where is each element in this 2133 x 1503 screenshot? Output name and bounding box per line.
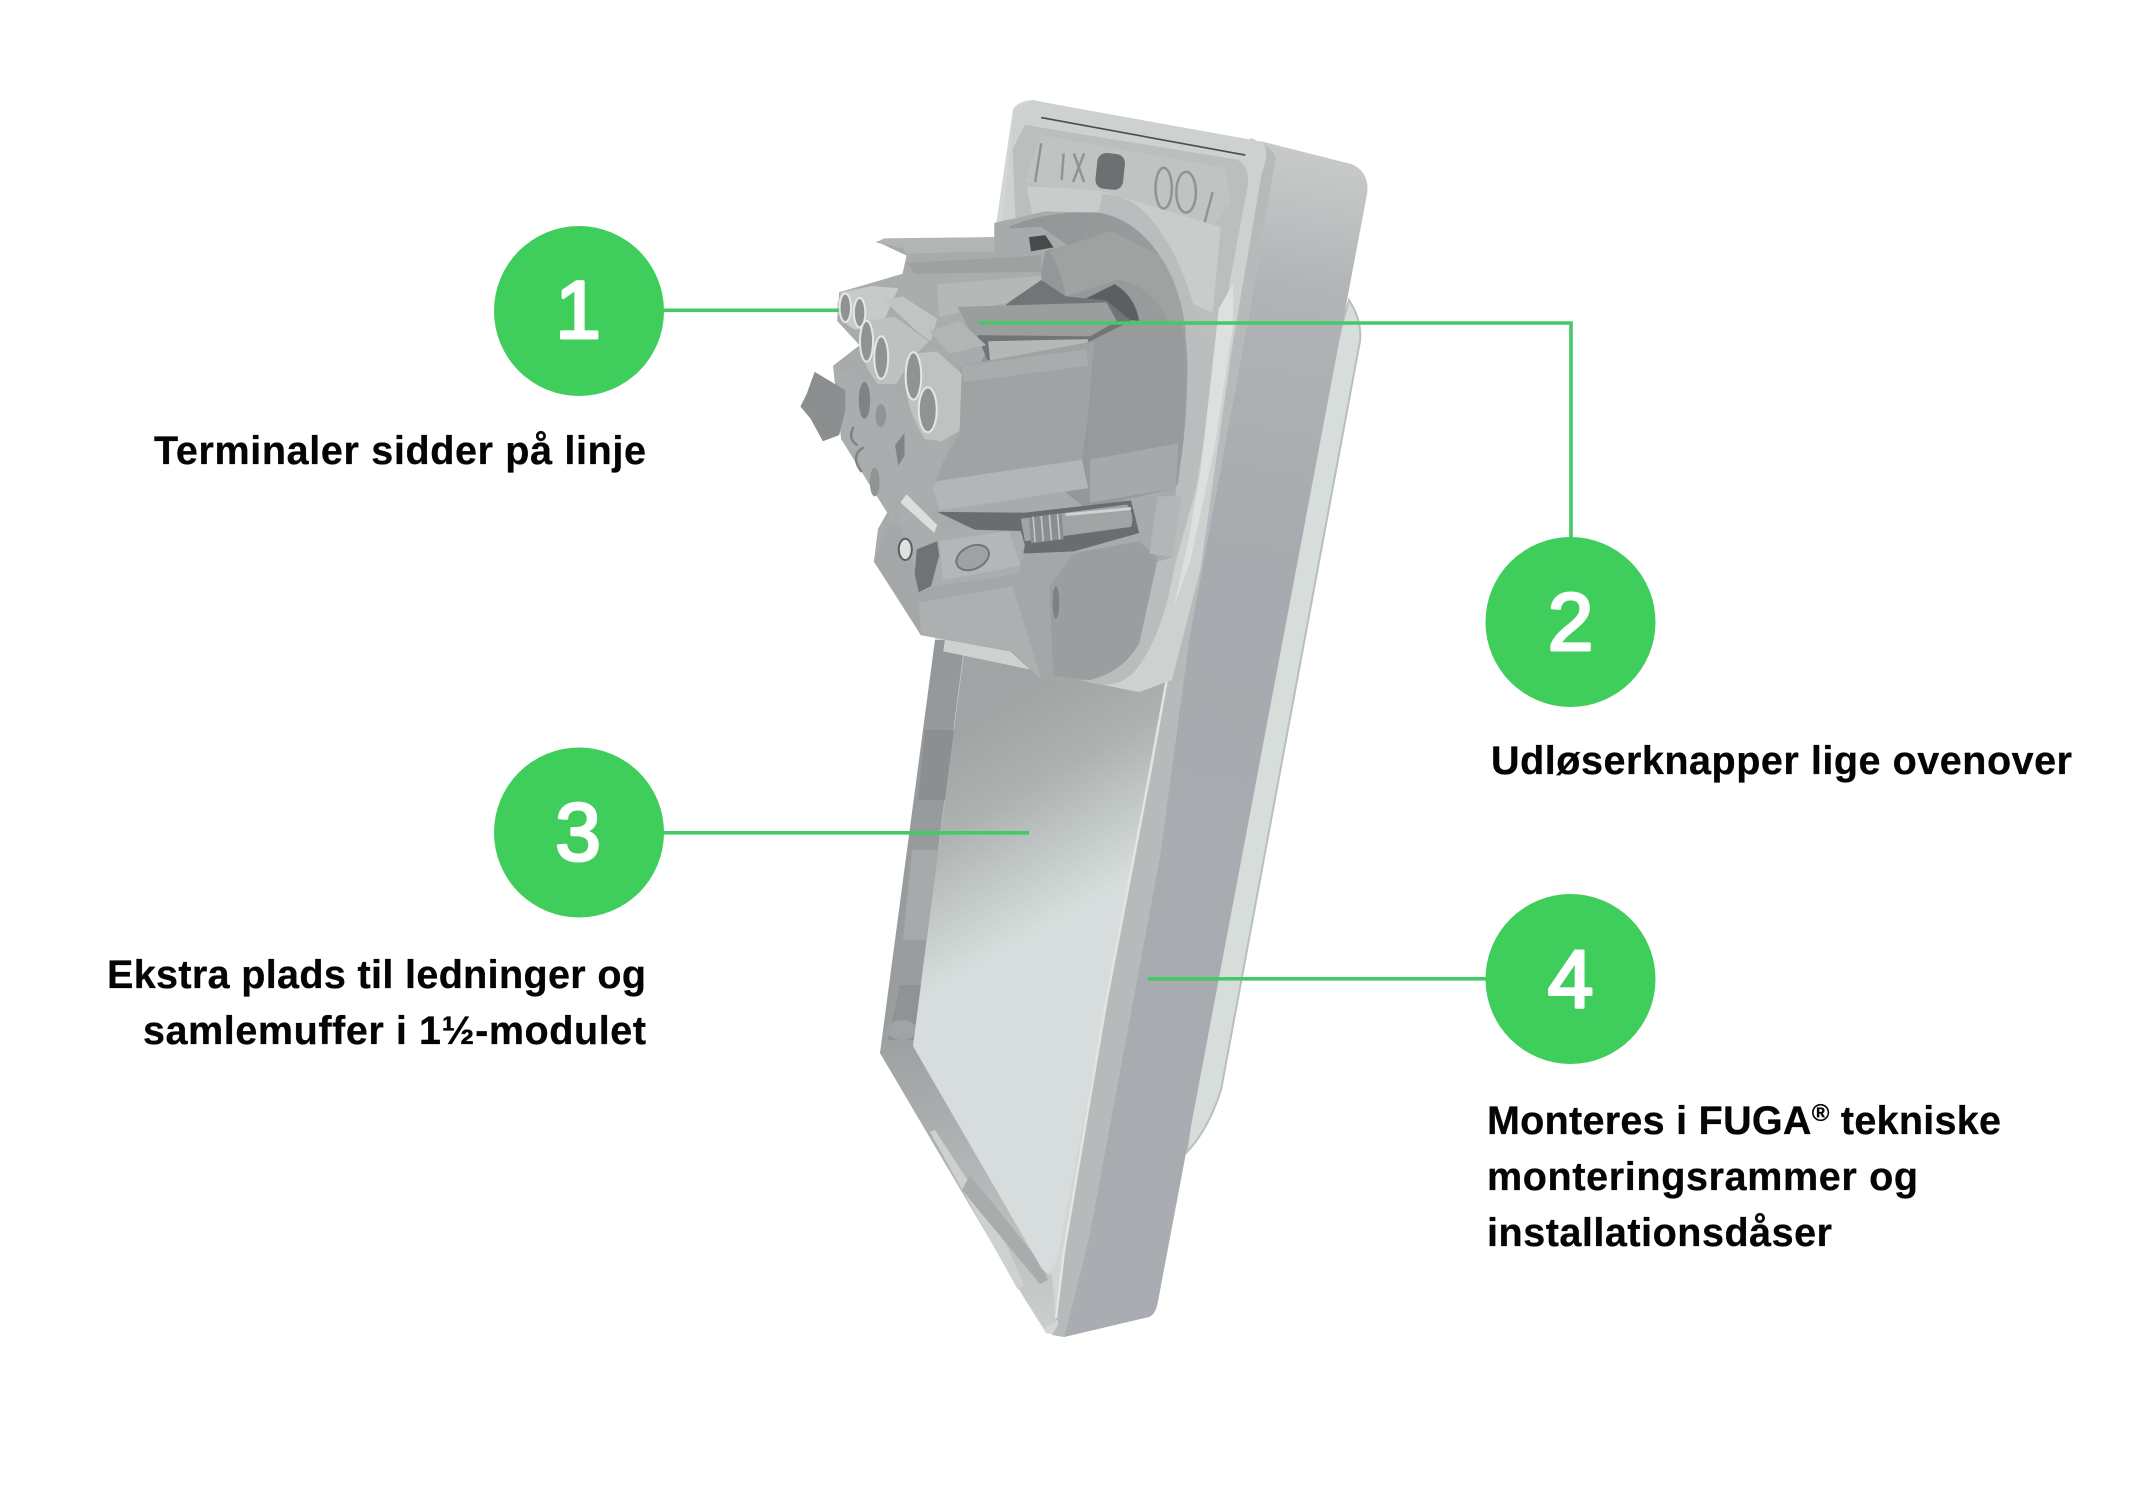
frame highlight — [1056, 175, 1257, 1318]
face markings — [851, 382, 904, 496]
frame inner strip — [1052, 138, 1276, 1337]
marker 3: 3 — [555, 787, 601, 878]
side hook — [800, 372, 845, 441]
label 4: installationsdåser — [1487, 1211, 1832, 1255]
moulded symbols — [1035, 143, 1213, 223]
callout line 4 — [1148, 977, 1488, 981]
lower housing — [874, 525, 1158, 680]
rear terminal nub — [837, 286, 898, 330]
label 2: Udløserknapper lige ovenover — [1491, 739, 2072, 783]
wall details — [888, 730, 1048, 1290]
main front tab — [958, 302, 1117, 336]
inner plate — [913, 640, 1178, 1274]
label 4 — [1487, 1099, 2001, 1255]
marker 2: 2 — [1548, 577, 1593, 668]
marking strip — [1025, 135, 1231, 227]
label 4: Monteres i FUGA — [1487, 1099, 1811, 1143]
clip right — [1149, 496, 1182, 558]
label 3 — [107, 953, 646, 1053]
middle terminal nub — [860, 317, 929, 384]
cylinder dark recess — [1082, 284, 1139, 321]
block rear — [841, 272, 1041, 341]
top tab 1 — [876, 237, 994, 253]
marker 2 — [1486, 537, 1656, 707]
marker 1 — [494, 226, 664, 396]
marker 1: 1 — [555, 265, 601, 356]
socket body flange — [1041, 194, 1204, 685]
label 1: Terminaler sidder på linje — [154, 429, 646, 473]
interior back wall — [1013, 125, 1248, 590]
socket silhouette base — [833, 211, 1187, 680]
upper flange plate — [1027, 186, 1221, 313]
terminal block face — [833, 366, 956, 627]
hole in rim — [1095, 152, 1126, 191]
callout line 3 — [660, 831, 1029, 835]
ribbed side strip — [1174, 284, 1233, 607]
front terminal nub — [904, 351, 962, 441]
marker 4 — [1486, 894, 1656, 1064]
slot shadow — [937, 500, 1139, 553]
label 4: ® — [1812, 1100, 1830, 1127]
cylinder light wedge — [1049, 231, 1186, 333]
interior top rim — [943, 100, 1266, 692]
marker 4: 4 — [1548, 934, 1593, 1025]
product photo: socket device — [800, 100, 1367, 1337]
marker 3 — [494, 748, 664, 918]
metal bracket — [896, 494, 1025, 592]
frame face band — [1064, 141, 1367, 1337]
callout line 1 — [660, 308, 839, 312]
top post — [994, 227, 1068, 276]
inner side walls — [880, 640, 1056, 1328]
socket shoulder — [1088, 325, 1184, 502]
label 4: monteringsrammer og — [1487, 1155, 1918, 1199]
tab cut-out shadow — [976, 280, 1131, 362]
socket group in local coordinates — [800, 100, 1266, 692]
label 4: tekniske — [1830, 1099, 2001, 1143]
terminal housing — [931, 341, 1094, 482]
socket cylinder — [956, 212, 1187, 509]
top tab 2 — [907, 256, 1041, 281]
callout line 2 — [979, 323, 1571, 540]
label 3: Ekstra plads til ledninger og — [107, 953, 646, 997]
shoulder lower light — [1090, 443, 1178, 502]
back panel behind frame — [1187, 300, 1360, 1152]
frame silhouette — [880, 100, 1367, 1337]
screw shaft — [1021, 504, 1132, 543]
upper divider wedge — [884, 296, 937, 341]
rim gap — [1041, 118, 1245, 155]
label 3: samlemuffer i 1½-modulet — [143, 1009, 646, 1053]
